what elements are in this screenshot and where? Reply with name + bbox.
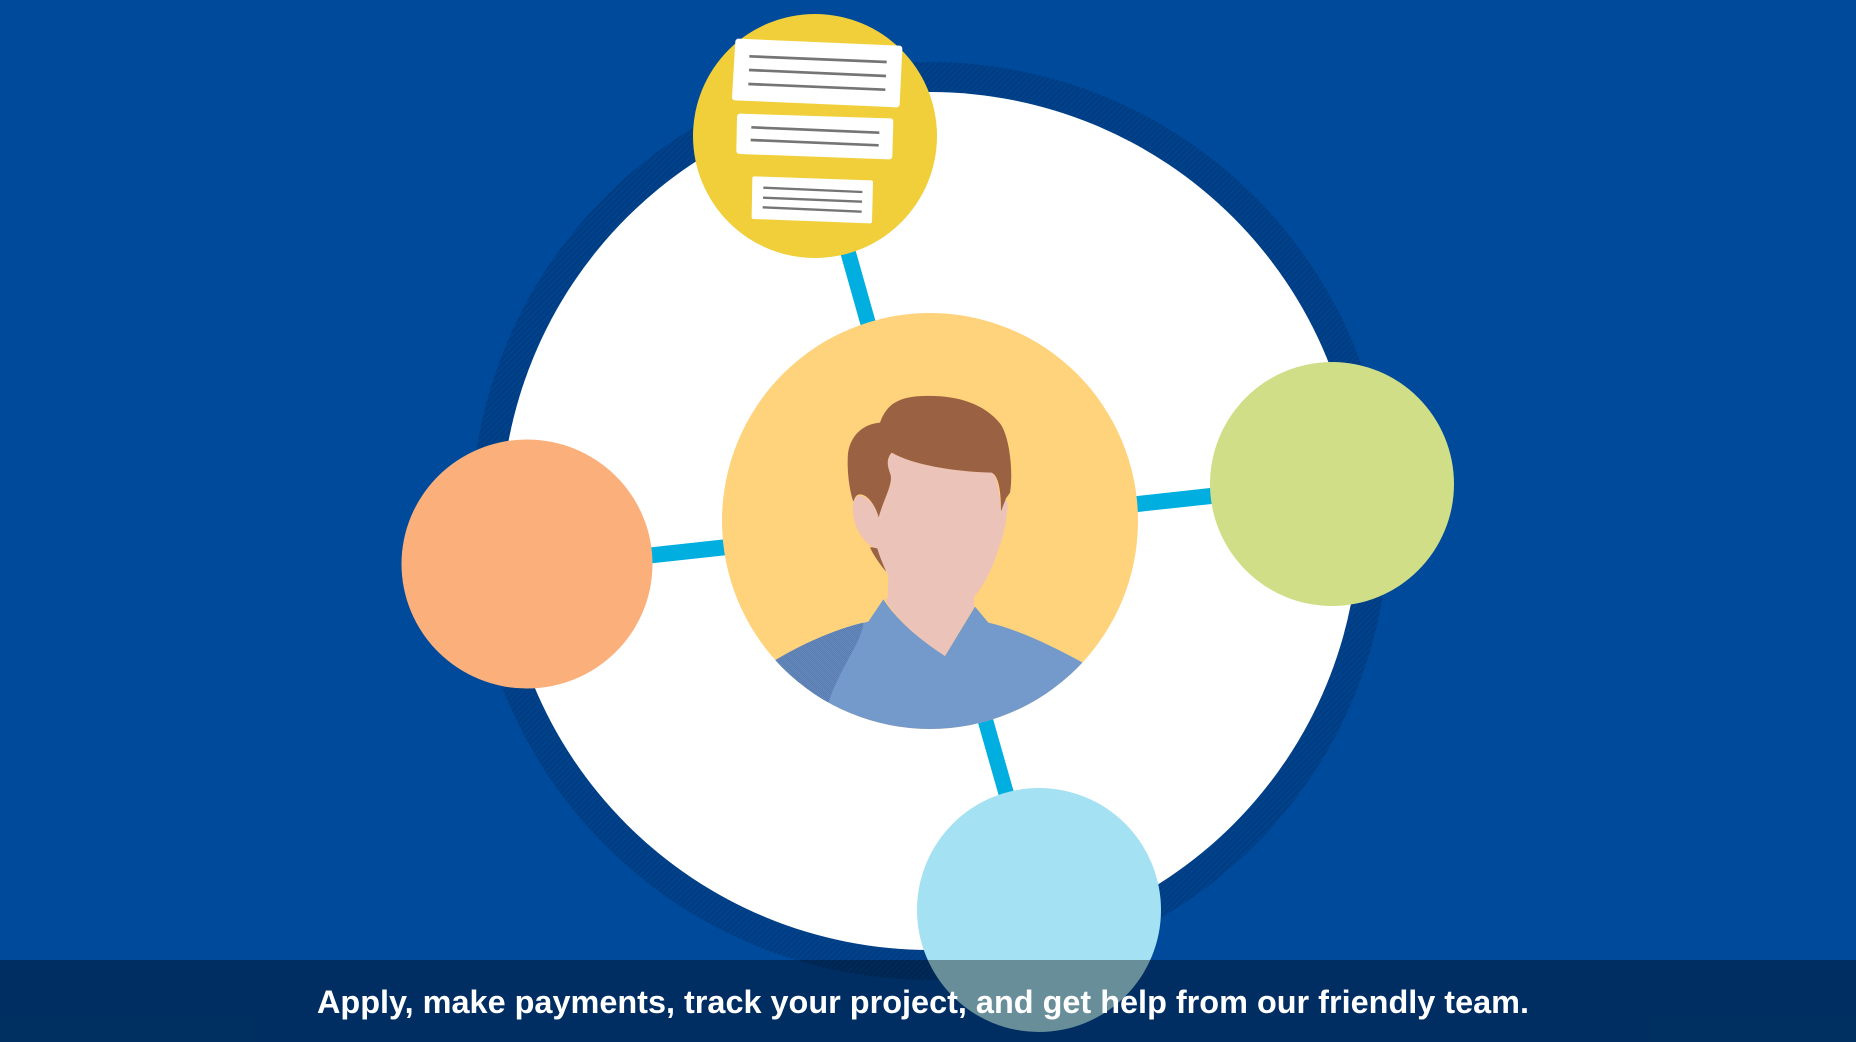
orange circle <box>402 440 652 688</box>
connector: right <box>1130 495 1220 505</box>
document card: small <box>754 178 871 221</box>
light blue circle <box>917 788 1161 1032</box>
connector: top <box>846 245 870 330</box>
document card: medium <box>739 117 890 156</box>
shirt shaded hatch <box>773 623 863 703</box>
back hair sliver <box>870 547 886 572</box>
caption bar <box>0 960 1856 1042</box>
central profile circle with person <box>722 313 1138 740</box>
white main disc <box>501 92 1359 950</box>
shirt <box>773 599 1084 740</box>
yellow circle with documents icon <box>693 14 937 258</box>
caption text: Apply, make payments, track your project, and get help from our friendly team. <box>317 984 1529 1020</box>
dark outer ring <box>471 62 1389 980</box>
skin: face and neck <box>853 453 1008 656</box>
person illustration <box>773 396 1084 740</box>
document card: large <box>735 42 899 104</box>
green circle <box>1210 362 1454 606</box>
connector: bottom <box>983 712 1010 805</box>
connector: left <box>640 546 735 557</box>
hair <box>848 396 1011 517</box>
